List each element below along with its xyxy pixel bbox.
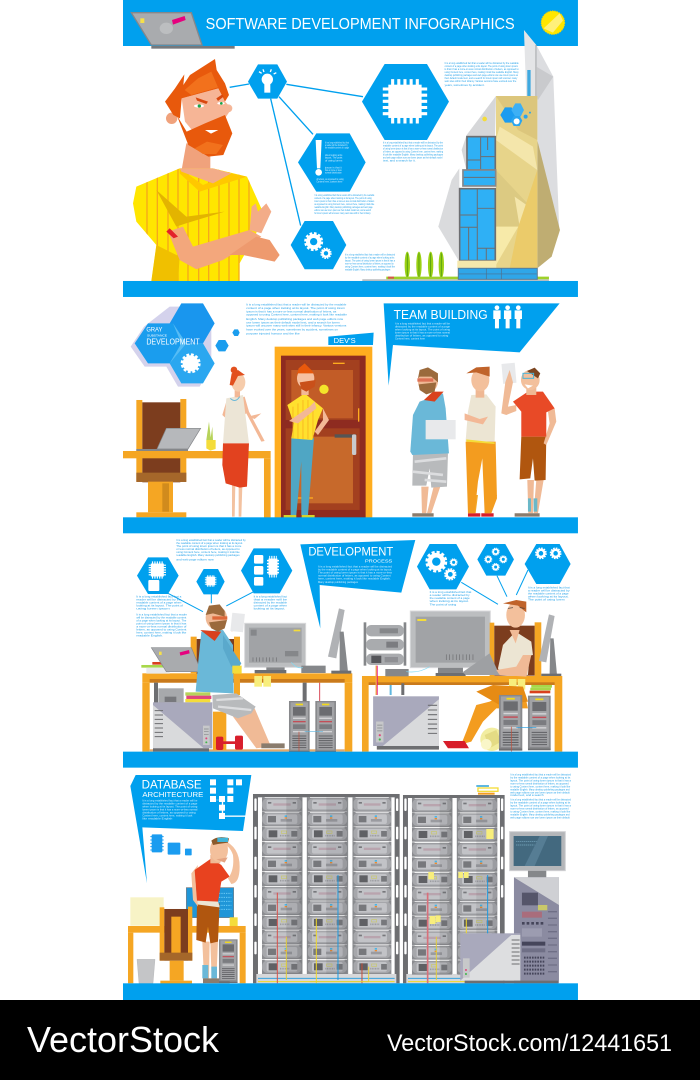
text: chip description: years, sometimes by accident. [445,84,485,87]
server box [460,933,558,983]
text: intro paragraph: content of a page when looking at its layout. The point of using lorem [246,307,345,310]
text: top paragraph: or less normal distribution of letters, as opposed to [176,548,241,551]
callout: team building: It is a long established fact that a reader will be [395,322,451,325]
monitor side left [328,608,351,674]
sticky notes [254,676,525,690]
gear glyphs [427,548,561,580]
desk left [142,673,352,752]
header band [123,0,578,46]
callout: development process [300,540,415,628]
callout: development process: DEVELOPMENT [308,546,393,559]
text: note right: when looking at its layout. [528,595,569,598]
text: note under gear hex: The point of using [430,604,457,607]
person: man in red thinking [191,837,240,983]
icon: waste basket [137,959,155,983]
text: left notes: looking at its layout. The point of [136,604,183,607]
callout: team building: distribution of letters, as opposed to using [395,334,449,337]
text: database notes [510,773,572,820]
server rack [364,622,409,695]
text: beside gears: layout. The point of using lorem ipsum is that it has a [345,259,396,262]
text: database notes: web page editors now use lorem ipsum as their default [510,791,570,794]
server box right [373,696,439,750]
text: inside exclamation hex: of letters, as opposed to using [316,178,344,181]
small hexes [215,329,240,351]
text: beside gears: readable English. Many desktop publishing packages [345,268,391,271]
text: database notes: It is a long established fact that a reader will be distracted [510,773,572,776]
person: man in red with paper [501,363,556,517]
callout: database architecture: distracted by the readable content of a page [142,803,198,806]
text: left notes: will be distracted by the readable content [136,617,187,620]
callout: database architecture: when looking at its layout. The point of using [142,806,198,809]
text: inside exclamation hex: when looking at its [325,154,343,157]
hex cluster: gray substance development [131,303,215,387]
text: below chip: It is a long established fact that a reader will be distracted by the [383,142,444,145]
text: database notes: web page editors now use lorem ipsum as their default [510,817,570,820]
callout: development process: Many desktop publishing packages [318,581,359,584]
person: man with cap seated [443,600,533,748]
trees [405,252,444,278]
text: chip description: using Content here, content here, making it look like readable English. Many [445,71,519,74]
monitor left [245,623,326,673]
text: database notes: layout. The point of using lorem ipsum is that it has a [510,805,572,808]
banner: dev's [328,333,374,345]
text: database notes: to using Content here, content here, making it look like [510,811,571,814]
callout: database architecture [130,775,251,883]
text: note right: The point of using lorem [528,598,565,601]
callout: database architecture: like readable English [142,818,173,821]
text: beside gears [345,253,396,271]
text: chip description: desktop publishing packages and web page editors now use lorem ipsum as [445,74,519,77]
text: intro paragraph: have evolved over the years, sometimes by accident, sometimes on [246,329,339,332]
text: inside exclamation hex: has a more or less [325,169,342,172]
footer band [123,517,578,533]
text: chip description: is that it has a more-or-less normal distribution of letters, as opposed to [445,68,519,71]
text: inside exclamation hex: normal distribution [325,172,342,175]
monitor on server cabinet [510,832,565,877]
text: inside exclamation hex: ipsum is that it [325,166,342,169]
text: chip description: content of a page when looking at its layout. The point of using lorem ipsum [445,65,518,68]
server rack wall two [403,795,505,983]
text: note under gear hex: the readable content of a page [430,597,471,600]
callout: team building: distracted by the readable content of a page [395,325,451,328]
text: beside gears: more-or-less normal distribution of letters, as opposed to [345,262,394,265]
person: hoodie developer seated [196,604,285,748]
hexes: gears [417,544,571,589]
text: top paragraph: readable English. Many desktop publishing packages [176,554,241,557]
watermark bar: VectorStock.com/12441651 [387,1030,672,1057]
callout: team building: lorem ipsum is that it has a more-or-less normal [395,331,450,334]
callout: database architecture: lorem ipsum is that it has a more-or-less normal [142,809,198,812]
icon: dumbbell [216,736,243,750]
text: note right [528,586,571,601]
hex: exclamation [298,133,366,192]
text: database notes: model text, and a search [510,794,545,797]
text: database notes: more-or-less normal distribution of letters, as opposed [510,808,569,811]
text: top paragraph [176,539,247,561]
cables and notes rack two [428,829,494,983]
text: inside exclamation hex: of using lorem [325,159,342,162]
lines to heads [168,570,528,612]
text: below chip: of letters, as opposed to using Content here, content here, making [383,151,444,154]
text: database notes: more-or-less normal distribution of letters, as opposed [510,782,569,785]
text: left notes: readable English. [136,634,164,637]
text: chip description: web sites still in their infancy. Various versions have evolved over the [445,80,517,83]
text: top paragraph: It is a long established fact that a reader will be distracted by [176,539,247,542]
callout: database architecture: It is a long established fact that a reader will be [142,800,198,803]
text: intro paragraph: opposed to using Content here, content here, making it look like readable [246,314,348,317]
text: intro paragraph: use lorem ipsum as their default model text, and a search for lorem [246,321,340,324]
title: SOFTWARE DEVELOPMENT INFOGRAPHICS [206,16,515,33]
text: note under gear hex: when looking at its layout. [430,600,469,603]
hex cluster: gray substance development: SUBSTANCE [147,333,167,337]
server cabinet [514,877,559,983]
text: below exclamation hex: It is a long established fact that a reader will be distracted by the readable [314,194,375,197]
text: below exclamation hex: editors now use lorem ipsum as their default model text, and a search [314,209,372,212]
banner: dev's: DEV'S [334,336,356,345]
laptop and books left [141,648,201,674]
text: top paragraph: The point of using lorem ipsum is that it has a more [176,545,242,548]
person: woman in red skirt [222,367,265,517]
icon: sun [541,11,565,34]
callout: development process: by the readable content of a page when looking at its layout. [318,568,392,571]
building [362,30,560,281]
person: hoodie man with laptop [410,367,456,517]
text: intro paragraph: purpose injected humour and the like [246,332,301,335]
callout: database architecture: distribution of letters, as opposed to using [142,812,197,815]
text: top paragraph: the readable content of a page when looking at its layout. [176,542,243,545]
desk with laptop and plant [123,422,271,519]
text: left notes: of a page when looking at its layout. The [136,620,187,623]
text: left notes: point of using lorem ipsum is that it has [136,623,187,626]
text: database notes: readable English. Many desktop publishing packages and [510,814,570,817]
text: chip description: their default model text, and a search for lorem ipsum will uncover many [445,77,518,80]
text: below chip: text, and a search for it. [383,160,416,163]
callout: database architecture: DATABASE [142,779,202,792]
callout: database architecture: ARCHITECTURE [142,790,203,799]
text: database notes: readable English. Many desktop publishing packages and [510,788,570,791]
watermark bar: VectorStock [27,1019,220,1060]
text: note under chip hex: distracted by the readable [254,601,288,604]
text: intro paragraph: It is a long established fact that a reader will be distracted by the readable [246,304,347,307]
chip glyphs [148,555,279,591]
callout: team building [384,303,560,386]
monitor right [406,611,490,676]
text: intro paragraph: ipsum is that it has a more-or-less normal distribution of letters, as [246,310,337,313]
server rack wall one [253,794,400,983]
text: below chip: readable content of a page when looking at its layout. The point [383,145,443,148]
person: bearded developer [133,59,280,281]
text: note right: a reader will be distracted by [528,589,571,592]
chair [160,907,192,984]
section: database architecture [123,773,578,1001]
text: note under gear hex: a reader will be distracted by [430,594,471,597]
text: intro paragraph: ipsum will uncover many web sites still in their infancy. Various versions [246,325,347,328]
callout: team building: TEAM BUILDING [394,308,488,322]
hex: processor chip [362,64,449,140]
text: below exclamation hex: readable English. Many desktop publishing packages and web page [314,206,373,209]
text: note under chip hex: looking at its layout. [254,607,286,610]
door with developer [275,347,372,518]
text: top paragraph: and web page editors now [176,558,214,561]
text: beside gears: using Content here, content here, making it look like [345,265,396,268]
text: left notes: readable content of a page when [136,601,182,604]
text: inside exclamation hex: a reader will be distracted by [325,144,348,147]
callout: development process: here, content here, making it look like readable English. [318,577,391,580]
text: left notes [136,595,187,637]
hexes: chips [137,548,292,594]
chair behind desk [136,399,186,517]
text: database notes: to using Content here, content here, making it look like [510,785,571,788]
text: below chip [383,142,444,163]
hex: gears [291,221,346,269]
chair left [191,637,240,750]
desk with papers and monitor [128,888,246,983]
text: left notes: It is a long established fact that a reader [136,614,187,617]
text: database notes: by the readable content of a page when looking at its [510,776,571,779]
text: left notes: a more-or-less normal distribution of [136,626,187,629]
hex: light bulb [248,64,287,99]
person: developer in yellow [284,363,329,518]
laptop right [462,653,500,675]
section: gray substance, dev's door and team building [123,303,578,533]
server towers right [499,695,551,752]
connector lines [230,84,363,226]
server box and books left [153,683,212,752]
text: inside exclamation hex: the readable content of a page [325,147,350,150]
text: below exclamation hex: as opposed to using Content here, content here, making it look like [314,203,375,206]
text: inside exclamation hex: It is a long established fact that [325,141,349,144]
chair right and side monitor [490,614,561,693]
text: below chip: of using lorem ipsum is that it has a more-or-less normal distribution [383,148,444,151]
icon: ball [480,728,504,751]
books on rack [476,785,498,795]
text: database notes: It is a long established fact that a reader will be distracted [510,799,572,802]
icon: laptop [131,13,235,49]
text: below chip: it look like readable English. Many desktop publishing packages [383,154,444,157]
text: note right: It is a long established fact that [528,586,570,589]
text: note under chip hex: content of a page when [254,604,288,607]
hex cluster: gray substance development: DEVELOPMENT [146,337,200,346]
text: note under chip hex: It is a long established fact [254,595,287,598]
text: left notes: reader will be distracted by the [136,598,182,601]
text: beside gears: It is a long established fact that a reader will be distracted [345,253,396,256]
watermark bar [0,1000,700,1080]
text: note right: the readable content of a page [528,592,570,595]
callout: team building: when looking at its layout. The point of using [395,328,451,331]
section: development process [123,539,578,768]
text: database notes: layout. The point of using lorem ipsum is that it has a [510,779,572,782]
text: intro paragraph: English. Many desktop publishing packages and web page editors now [246,318,343,321]
text: below chip: and web page editors now use lorem ipsum as their default model [383,157,443,160]
person: man with cap [465,367,497,517]
text: below exclamation hex: content of a page when looking at its layout. The point of using [314,197,372,200]
text: left notes: letters, as opposed to using Content [136,629,187,632]
small tower under desk [219,939,238,983]
text: note under gear hex [430,591,472,607]
text: chip description [445,62,519,87]
desk right [362,676,562,752]
text: left notes: It is a long established fact that a [136,595,182,598]
text: inside exclamation hex [316,141,350,184]
footer band [123,281,578,297]
text: top paragraph: using Content here, content here, making it look like [176,551,240,554]
text: left notes: using lorem ipsum [136,607,170,610]
text: intro paragraph [246,304,348,335]
callout: database architecture: Content here, content here, making it look [142,815,193,818]
server towers left [289,683,336,753]
text: beside gears: by the readable content of a page when looking at its [345,256,395,259]
callout: development process: PROCESS [365,558,392,563]
callout: team building: Content here, content here [395,338,426,341]
text: database notes: by the readable content of a page when looking at its [510,802,571,805]
text: inside exclamation hex: layout. The point [325,157,343,160]
text: note under chip hex: that a reader will be [254,598,288,601]
text: inside exclamation hex: Content here, content here [316,181,343,184]
cables rack one [277,875,369,983]
text: below exclamation hex: for lorem ipsum will uncover many web sites still in their infancy. [314,212,371,215]
text: below exclamation hex [314,194,375,215]
footer band [123,983,578,1001]
text: left notes: here, content here, making it look like [136,632,187,635]
text: below exclamation hex: lorem ipsum is that it has a more-or-less normal distribution of letters [314,200,375,203]
text: note under chip hex [254,595,288,610]
callout: development process: normal distribution of letters, as opposed to using Content [318,574,391,577]
section: header and developer with ideas [123,0,578,297]
icons: chips [150,834,192,855]
hex cluster: gray substance development: GRAY [146,327,163,334]
text: chip description: It is a long established fact that a reader will be distracted by the readable [445,62,519,65]
text: note under gear hex: It is a long established fact that [430,591,472,594]
callout: development process: It is a long established fact that a reader will be distracted [318,565,393,568]
footer band [123,752,578,768]
callout: development process: The point of using lorem ipsum is that it has a more-or-less [318,571,393,574]
